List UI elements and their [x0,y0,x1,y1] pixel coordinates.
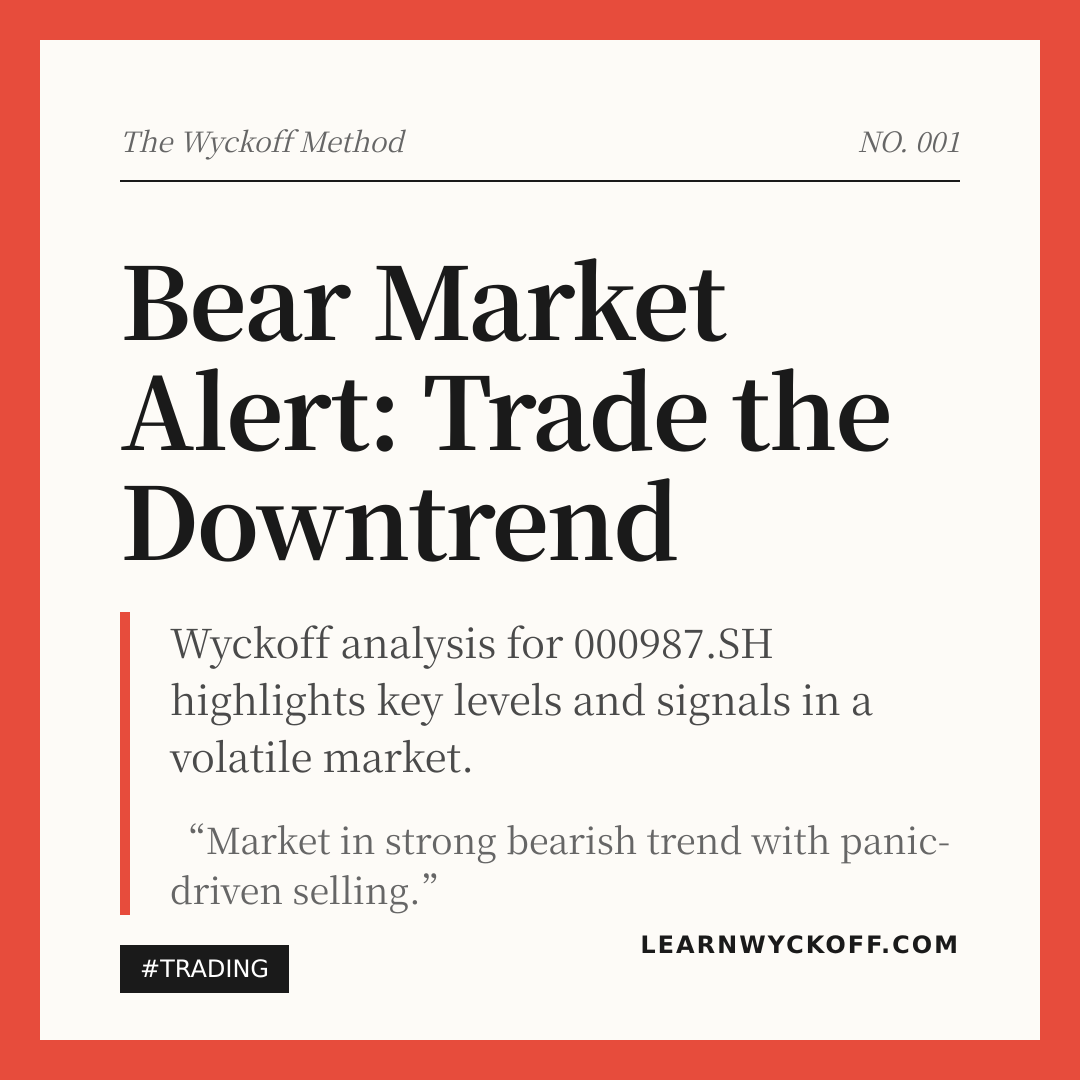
summary text [170,613,873,784]
summary text: Wyckoff analysis for 000987.SH [170,613,774,670]
website label: LEARNWYCKOFF.COM [640,931,960,959]
summary text: highlights key levels and signals in a [170,670,873,727]
header rule [120,180,960,182]
hashtag badge: #TRADING [140,955,269,983]
quote text: driven selling.” [170,864,457,915]
header label: issue number: NO. 001 [857,121,960,161]
hashtag badge [120,945,289,993]
summary text: volatile market. [170,727,474,784]
quote text [170,814,950,915]
title: Downtrend [120,445,677,589]
header label: series name: The Wyckoff Method [120,121,404,161]
title: Bear Market [120,225,725,369]
title: Alert: Trade the [120,335,891,479]
quote text: “Market in strong bearish trend with panic- [170,814,950,865]
title [120,225,891,589]
red accent bar [120,612,130,915]
